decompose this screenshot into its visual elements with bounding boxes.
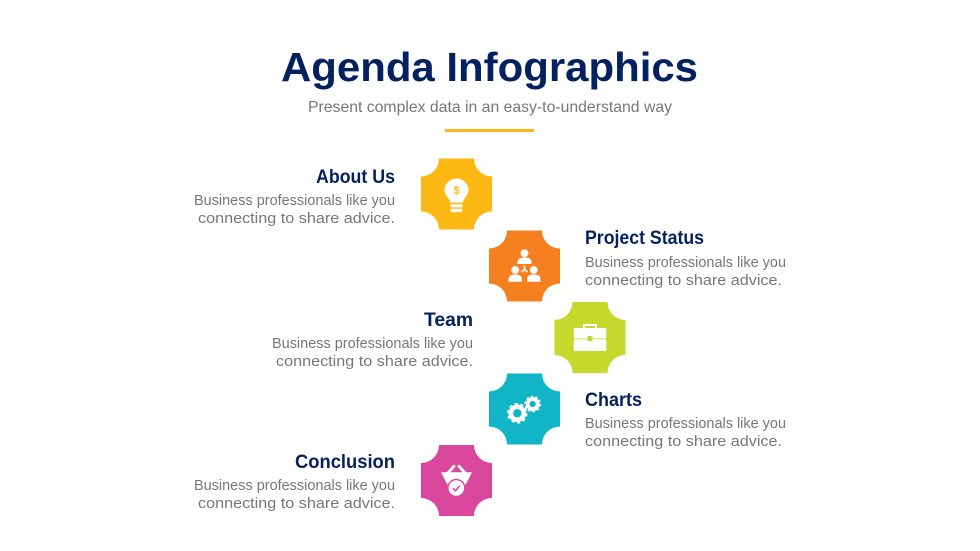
icon tile: teal gears: [489, 374, 560, 444]
item: About Us text: Business professionals like you: [194, 193, 395, 209]
item: Project Status text: Business professionals like you: [585, 255, 786, 271]
item: Team text: Business professionals like you: [272, 336, 473, 352]
item: Team text: Team: [424, 310, 473, 331]
icon tile: pink basket with check: [421, 445, 492, 516]
item: Team text: [272, 310, 473, 370]
item: Conclusion text: connecting to share advice.: [198, 496, 395, 512]
item: Conclusion text: Conclusion: [295, 452, 395, 473]
subtitle: Present complex data in an easy-to-understand way: [308, 99, 672, 116]
item: Project Status text: [585, 228, 786, 289]
item: About Us text: [194, 167, 395, 227]
item: Team text: connecting to share advice.: [276, 354, 473, 370]
icon tile: yellow light bulb: [421, 158, 492, 230]
item: Project Status text: Project Status: [585, 228, 704, 249]
icon tile: green briefcase: [554, 302, 626, 373]
title: Agenda Infographics: [281, 44, 698, 90]
item: Charts text: [585, 390, 786, 450]
item: Conclusion text: [194, 452, 395, 512]
item: Conclusion text: Business professionals like you: [194, 478, 395, 494]
item: Charts text: connecting to share advice.: [585, 434, 782, 450]
icon tile: orange team hierarchy: [489, 230, 560, 302]
item: Charts text: Charts: [585, 390, 642, 411]
icon tile: yellow light bulb: $: [453, 185, 460, 197]
item: About Us text: About Us: [316, 167, 395, 188]
accent underline: [445, 129, 534, 132]
item: About Us text: connecting to share advice.: [198, 211, 395, 227]
item: Charts text: Business professionals like you: [585, 416, 786, 432]
item: Project Status text: connecting to share advice.: [585, 273, 782, 289]
